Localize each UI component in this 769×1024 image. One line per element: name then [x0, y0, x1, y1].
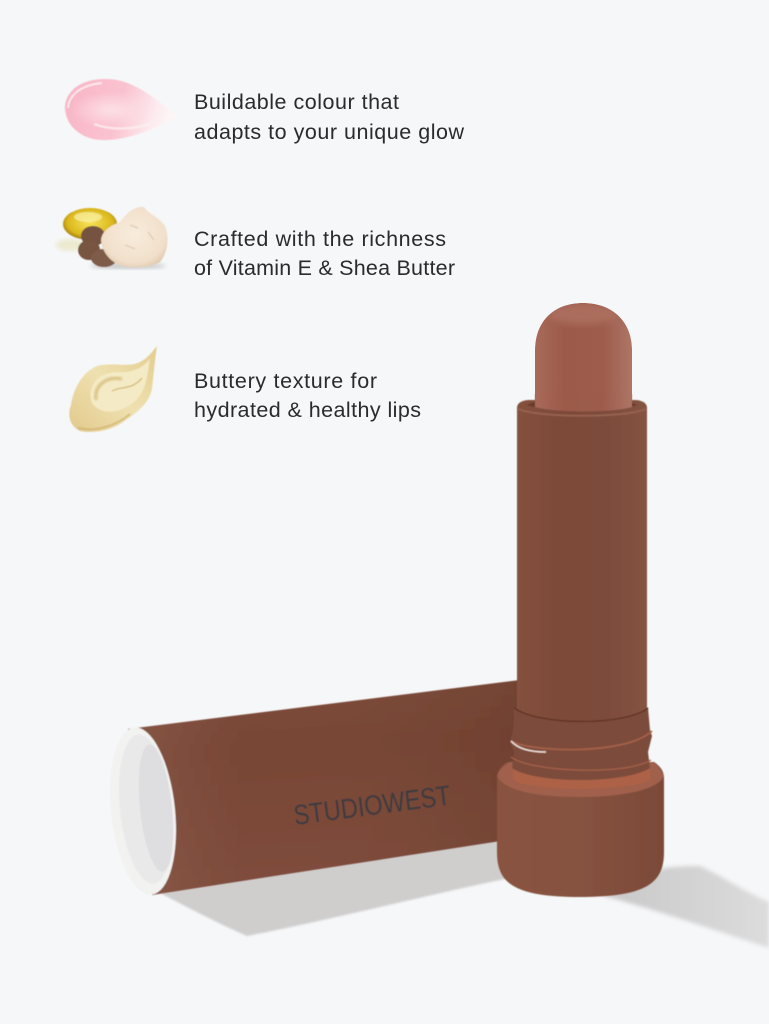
lipstick bullet	[535, 303, 632, 400]
cast shadow of lipstick	[600, 866, 769, 948]
collar	[510, 708, 652, 780]
lipstick base	[497, 762, 664, 897]
text: buttery texture	[194, 369, 421, 422]
groove	[513, 762, 650, 789]
rim of cap	[102, 724, 184, 898]
lipstick tube	[514, 394, 648, 722]
brand name: STUDIOWEST	[292, 780, 452, 831]
icon: cream swatch	[69, 346, 157, 432]
text: buildable colour	[194, 90, 464, 144]
threaded collar and base	[497, 708, 664, 897]
cap of lipstick	[102, 680, 520, 898]
icon: vitamin E capsule and shea butter	[56, 207, 167, 269]
text: buttery texture: hydrated & healthy lips	[194, 398, 421, 422]
text: buildable colour: adapts to your unique glow	[194, 120, 464, 144]
text: crafted with: Crafted with the richness	[194, 227, 446, 251]
icon: pink lip gloss swatch	[65, 79, 178, 140]
lipstick highlight	[549, 303, 617, 325]
text: crafted with: of Vitamin E & Shea Butter	[194, 256, 455, 280]
text: crafted with	[194, 227, 455, 280]
text: buildable colour: Buildable colour that	[194, 90, 399, 114]
base top ledge	[497, 762, 664, 797]
cast shadow of cap	[160, 838, 510, 936]
text: buttery texture: Buttery texture for	[194, 369, 377, 393]
